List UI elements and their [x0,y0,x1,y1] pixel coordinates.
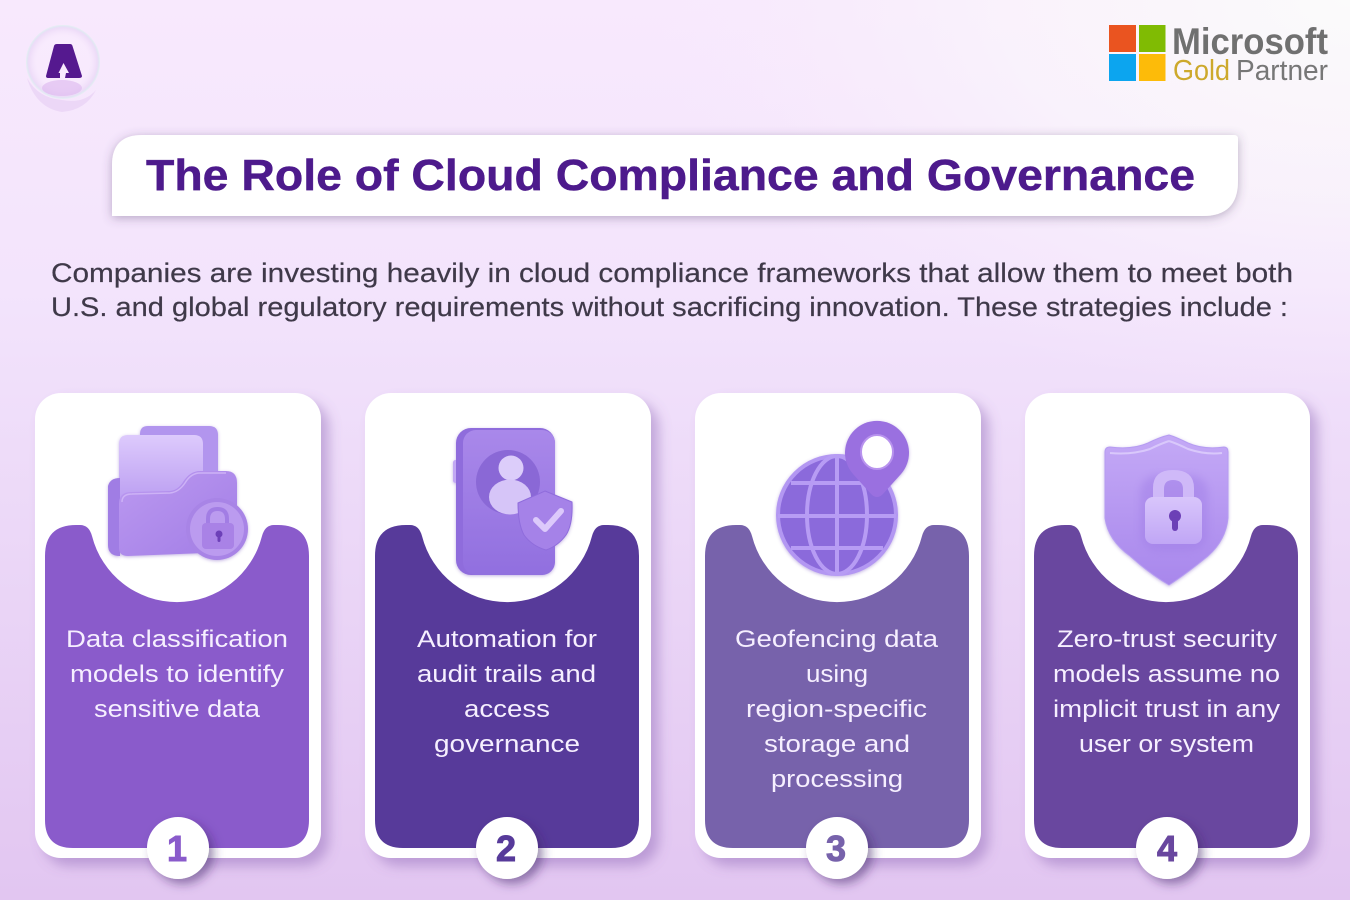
intro text: Companies are investing heavily in cloud compliance frameworks that allow them to meet both [51,258,1293,288]
card 2 text: audit trails and [417,661,596,688]
icon: shield with padlock [1105,435,1228,585]
card 3 text: storage and [764,731,910,758]
card 1 text: Data classification [66,626,288,653]
card 1 text: sensitive data [94,696,261,723]
card 2 text: access [464,696,550,723]
icon: folder with lock [108,426,248,560]
number badge 1: 1 [167,828,187,869]
card 4 text: implicit trust in any [1053,696,1280,723]
Microsoft Gold Partner logo: Microsoft [1172,21,1328,62]
card 3 text [735,626,939,793]
card 4 text: user or system [1079,731,1254,758]
card 1 text: models to identify [70,661,284,688]
number badge 2: 2 [496,828,516,869]
card 2 text: governance [434,731,580,758]
Microsoft Gold Partner logo [1109,21,1328,87]
card 3 text: processing [771,766,903,793]
card 4 text: Zero-trust security [1057,626,1277,653]
intro text: U.S. and global regulatory requirements without sacrificing innovation. These strategies include : [51,292,1288,322]
title banner: The Role of Cloud Compliance and Governance [146,151,1195,200]
title banner [112,135,1238,216]
number badge 2 [476,817,538,879]
card 4 text: models assume no [1053,661,1280,688]
company bubble logo [26,26,100,112]
number badge 4: 4 [1157,828,1177,869]
intro text [51,258,1293,322]
icon: Microsoft four squares [1109,25,1166,81]
icon: phone with user and shield [453,428,572,575]
Microsoft Gold Partner logo: Partner [1236,55,1328,87]
card 3 text: region-specific [746,696,927,723]
number badge 4 [1136,817,1198,879]
number badge 1 [147,817,209,879]
card 3 text: using [806,661,868,688]
card 2 text: Automation for [417,626,597,653]
panel: card 4 zero trust [1025,393,1310,879]
card 1 text [66,626,288,723]
number badge 3 [806,817,868,879]
card 2 text [417,626,597,758]
Microsoft Gold Partner logo: Gold [1173,55,1230,87]
panel: card 3 geofencing [695,393,981,879]
card 4 text [1053,626,1280,758]
panel: card 2 audit automation [365,393,651,879]
number badge 3: 3 [826,828,846,869]
panel: card 1 data classification [35,393,321,879]
icon: globe with location pin [778,421,909,574]
card 3 text: Geofencing data [735,626,939,653]
